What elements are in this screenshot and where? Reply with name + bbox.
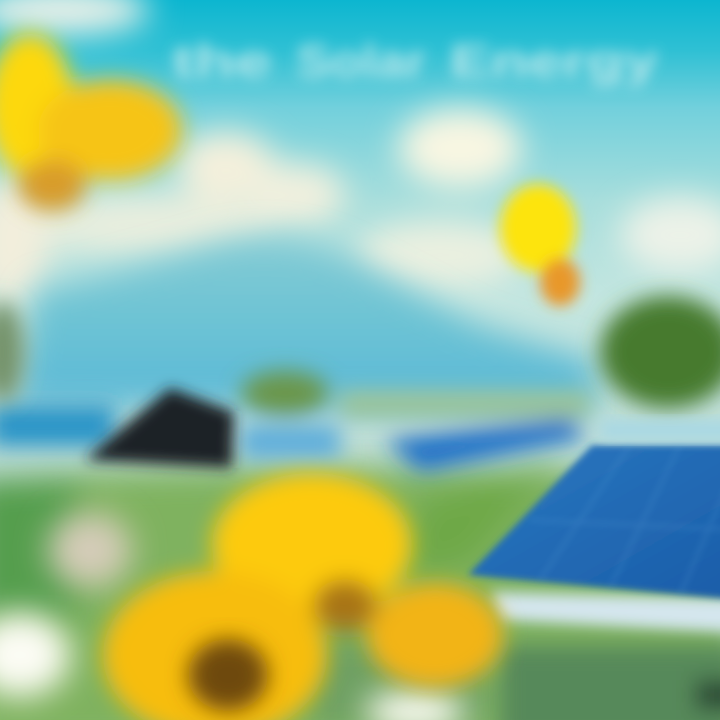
tree right: [0, 296, 720, 408]
title text, blurred: [172, 35, 659, 87]
white flowers left: [0, 512, 465, 720]
foreground under the panel: [500, 645, 720, 720]
title text, blurred: Solar: [296, 35, 426, 87]
solar panel: [468, 420, 720, 634]
small sun / balloon: [500, 184, 580, 306]
title text, blurred: the: [172, 35, 272, 87]
panel frame: [490, 592, 720, 634]
clouds: [0, 0, 720, 304]
ground meadow: [0, 460, 720, 720]
sunflower center: [188, 639, 268, 711]
sunflowers: [103, 473, 503, 720]
panel top glow: [600, 420, 720, 440]
title text, blurred: Energy: [450, 35, 659, 87]
distant horizon water and hills: [0, 371, 590, 472]
large sun top left: [0, 33, 182, 211]
barn: [85, 388, 234, 468]
panel grid lines: [530, 445, 720, 595]
panel surface: [468, 445, 720, 600]
mountain: [15, 237, 595, 410]
